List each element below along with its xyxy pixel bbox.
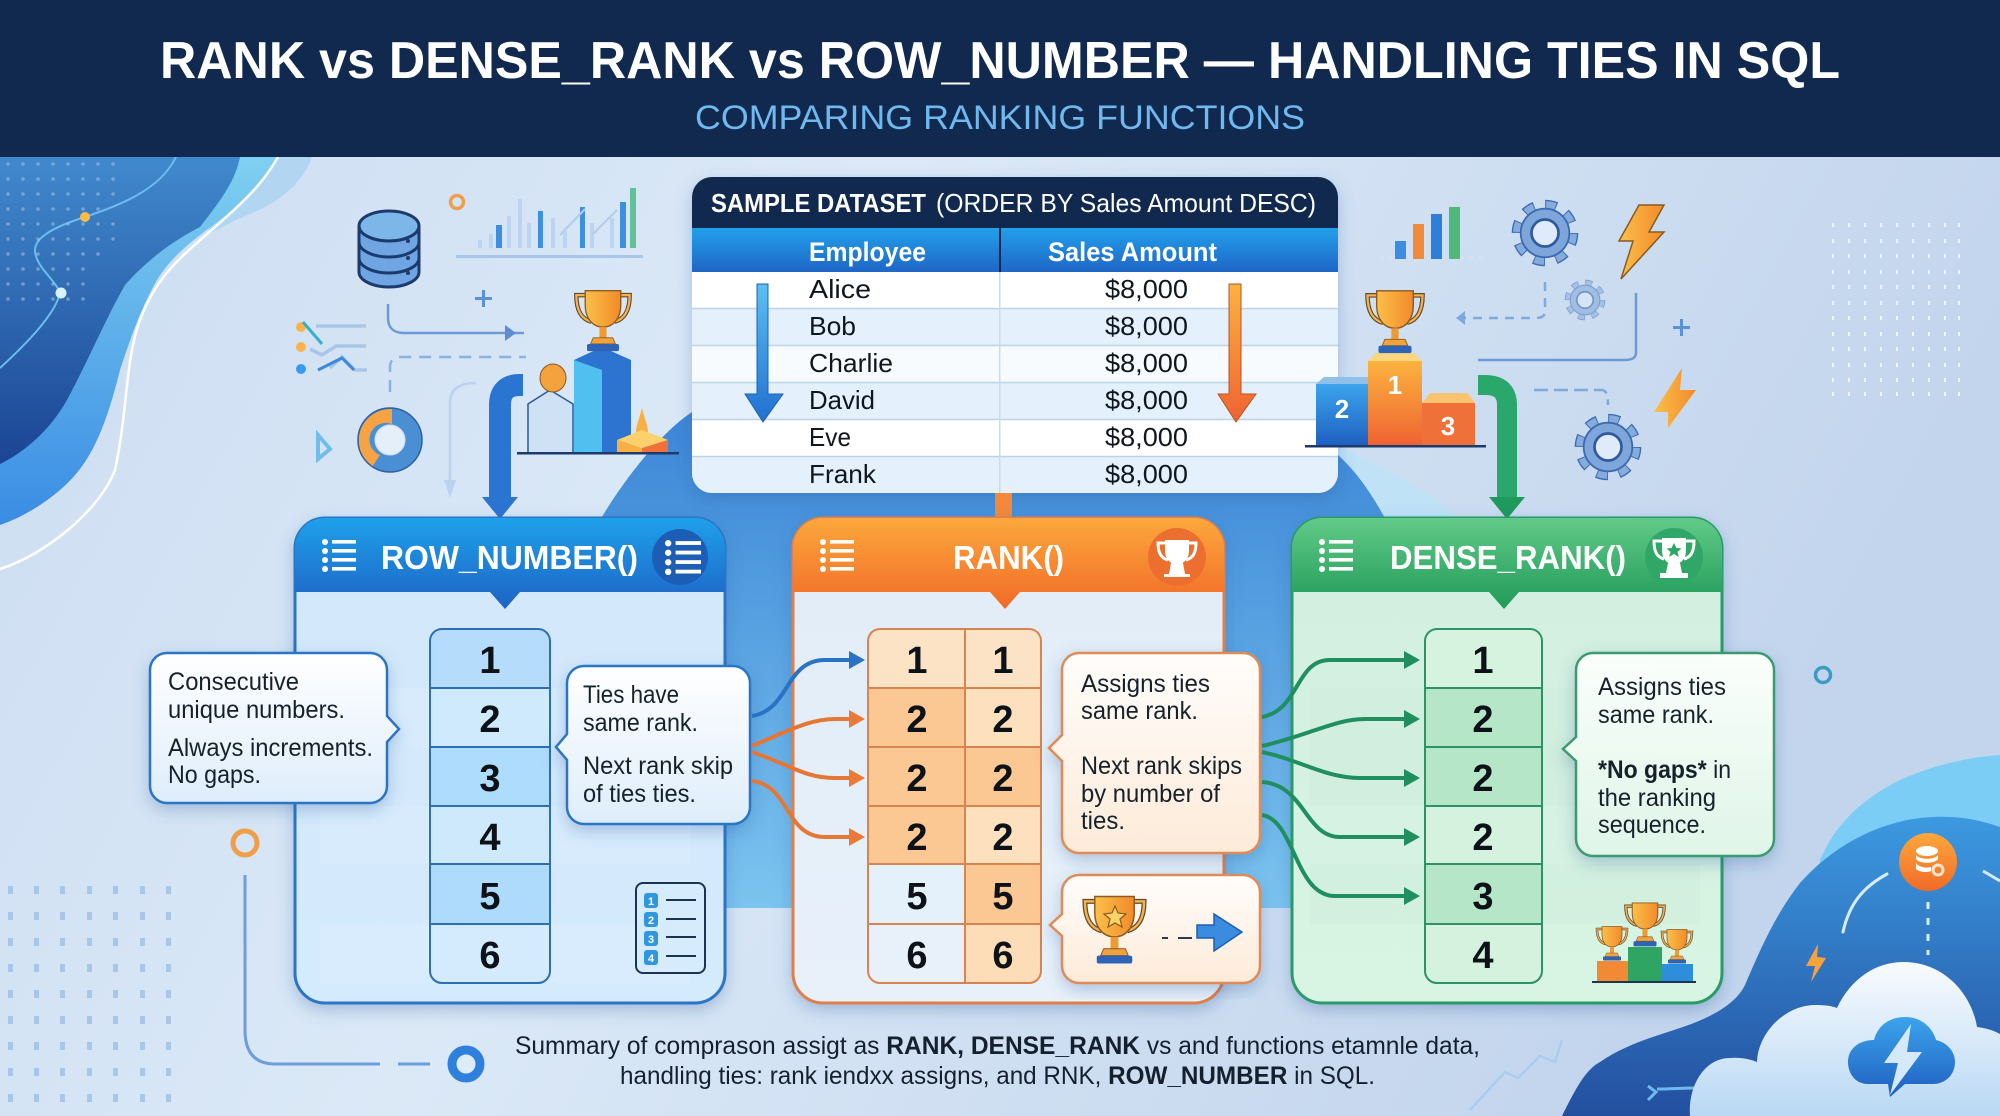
table column header: Sales Amount [1048,237,1217,267]
rank columns: RANK: 2 [992,758,1014,800]
icon: orange database badge [1899,833,1957,891]
callout: RANK assigns ties: same rank. [1081,697,1198,725]
table column header: Employee [809,237,926,267]
body stripes [1310,688,1700,924]
callout: ties have same rank: of ties ties. [583,780,696,808]
header: RANK: RANK() [953,539,1064,576]
rank columns: RANK: 2 [906,699,928,741]
callout: ties have same rank [556,666,750,824]
rank column: ROW_NUMBER [430,629,550,983]
rank columns: RANK [868,629,1041,983]
table rows: David [809,385,875,415]
rank column: DENSE_RANK: 4 [1472,935,1494,977]
icon: numbered list card: 2 [648,915,654,927]
rank column: DENSE_RANK: 2 [1472,817,1494,859]
rank column: ROW_NUMBER: 6 [479,935,501,977]
rank column: ROW_NUMBER: 1 [479,640,501,682]
icon: bar podium with trophy left [517,291,679,454]
callout: consecutive numbers: unique numbers. [168,696,345,724]
rank columns: RANK: 2 [992,699,1014,741]
small decoration icons left [296,188,643,498]
header: DENSE_RANK [1292,518,1722,609]
rank columns: RANK: 2 [906,817,928,859]
icon: numbered list card: 3 [648,934,654,946]
decoration: top-left waves [0,157,312,569]
panel: sample dataset table [692,177,1338,493]
rank column: ROW_NUMBER: 3 [479,758,501,800]
icon: podium right with trophy: 3 [1441,411,1455,441]
table rows: $8,000 [1105,422,1188,452]
small ring bottom-left [233,831,257,855]
table rows [692,272,1338,493]
icon: database [359,211,419,287]
rank column: DENSE_RANK: 3 [1472,876,1494,918]
icon: donut chart [358,408,422,472]
panel: RANK card [793,518,1224,1003]
callout: DENSE_RANK no gaps [1563,653,1774,856]
icon: podium right with trophy [1305,291,1486,448]
arrow: dataset to DENSE_RANK [1478,385,1525,519]
decoration: bottom-left dot grid [8,886,171,1102]
header: ROW_NUMBER [295,518,725,609]
rank column: DENSE_RANK: 2 [1472,758,1494,800]
icon: lightning lower [1654,368,1696,428]
rank columns: RANK: 5 [992,876,1014,918]
callout: DENSE_RANK no gaps: same rank. [1598,701,1714,729]
rank columns: RANK: 1 [906,640,928,682]
icon: gear lower [1581,420,1635,474]
decoration: right dot grid [1832,223,1960,396]
rank columns: RANK: 6 [906,935,928,977]
icon: numbered list card [636,883,705,973]
arrow: orange sort direction [1218,284,1256,422]
icon: blue ring node [452,1050,480,1078]
decoration: bottom-right cloud landscape [1562,755,2000,1116]
small teal ring right [1816,668,1830,682]
rank column: ROW_NUMBER: 4 [479,817,501,859]
connector: table to RANK [995,493,1012,519]
background: blue arch behind the cards [600,400,1460,908]
icon: cloud with lightning [1848,1017,1955,1097]
panel: ROW_NUMBER card [295,518,725,1003]
callout: consecutive numbers: No gaps. [168,761,261,789]
rank column: DENSE_RANK: 1 [1472,640,1494,682]
callout: DENSE_RANK no gaps: *No gaps* in [1598,756,1731,784]
table title bar: (ORDER BY Sales Amount DESC) [936,188,1316,218]
title: RANK vs DENSE_RANK vs ROW_NUMBER — HANDLING TIES IN SQL [160,32,1840,90]
callout: DENSE_RANK no gaps: the ranking [1598,784,1716,812]
icon: trophy [1085,896,1144,964]
icon: three trophies on podium [1592,903,1696,983]
icon: podium right with trophy: 2 [1335,394,1349,424]
callout: trophy and arrow [1050,875,1260,983]
table rows: $8,000 [1105,311,1188,341]
callout: ties have same rank: Next rank skip [583,752,733,780]
callout: RANK assigns ties [1049,653,1260,853]
rank column: DENSE_RANK [1425,629,1542,983]
callout: DENSE_RANK no gaps: Assigns ties [1598,673,1726,701]
icon: podium right with trophy: 1 [1388,370,1402,400]
table title bar [692,177,1338,228]
rank columns: RANK: 1 [992,640,1014,682]
table rows: $8,000 [1105,348,1188,378]
header: DENSE_RANK: DENSE_RANK() [1390,539,1626,576]
icon: orange bolt on blue [1806,944,1826,982]
rank columns: RANK: 6 [992,935,1014,977]
icon: dashed arrow [1162,914,1242,951]
decoration: faint trend line bottom [1470,1040,1562,1110]
arrows: row notes to RANK rows [752,651,865,846]
panel: DENSE_RANK card [1292,518,1722,1003]
arrows: rank notes to DENSE_RANK rows [1262,651,1420,905]
callout: DENSE_RANK no gaps: sequence. [1598,811,1706,839]
body stripes [320,688,690,983]
table rows: Charlie [809,348,893,378]
callout: consecutive numbers: Always increments. [168,734,373,762]
small decoration icons right [1378,207,1690,405]
header: ROW_NUMBER: ROW_NUMBER() [381,539,638,576]
callout: RANK assigns ties: Next rank skips [1081,752,1242,780]
icon: gear top [1518,206,1572,260]
icon: faint gear [1568,284,1602,316]
icon: lightning top [1619,205,1664,279]
callout: RANK assigns ties: by number of [1081,780,1220,808]
table column header [692,228,1338,272]
arrow: dataset to ROW_NUMBER [482,385,523,519]
rank column: DENSE_RANK: 2 [1472,699,1494,741]
rank column: ROW_NUMBER: 5 [479,876,501,918]
table rows: $8,000 [1105,459,1188,489]
callout: consecutive numbers: Consecutive [168,668,299,696]
rank columns: RANK: 2 [906,758,928,800]
arrow: blue sort direction [745,284,783,422]
table rows: Eve [809,422,851,452]
callout: ties have same rank: Ties have [583,681,679,709]
callout: consecutive numbers [150,653,399,803]
icon: numbered list card: 4 [648,953,655,965]
table rows: Bob [809,311,856,341]
subtitle: COMPARING RANKING FUNCTIONS [695,99,1305,137]
table rows: $8,000 [1105,385,1188,415]
footer summary text: handling ties: rank iendxx assigns, and RNK, ROW_NUMBER in SQL. [620,1062,1375,1090]
header: RANK [793,518,1224,609]
rank column: ROW_NUMBER: 2 [479,699,501,741]
rank columns: RANK: 5 [906,876,928,918]
table rows: Alice [809,274,871,304]
icon: numbered list card: 1 [648,896,654,908]
callout: ties have same rank: same rank. [583,709,698,737]
table rows: Frank [809,459,877,489]
footer summary text: Summary of comprason assigt as RANK, DENSE_RANK vs and functions etamnle data, [515,1032,1480,1060]
table title bar: SAMPLE DATASET [711,188,926,218]
table rows: $8,000 [1105,274,1188,304]
footer summary text [515,1032,1480,1090]
connector line bottom-left [245,875,430,1064]
callout: RANK assigns ties: Assigns ties [1081,670,1210,698]
rank columns: RANK: 2 [992,817,1014,859]
title banner [0,0,2000,157]
callout: RANK assigns ties: ties. [1081,807,1125,835]
